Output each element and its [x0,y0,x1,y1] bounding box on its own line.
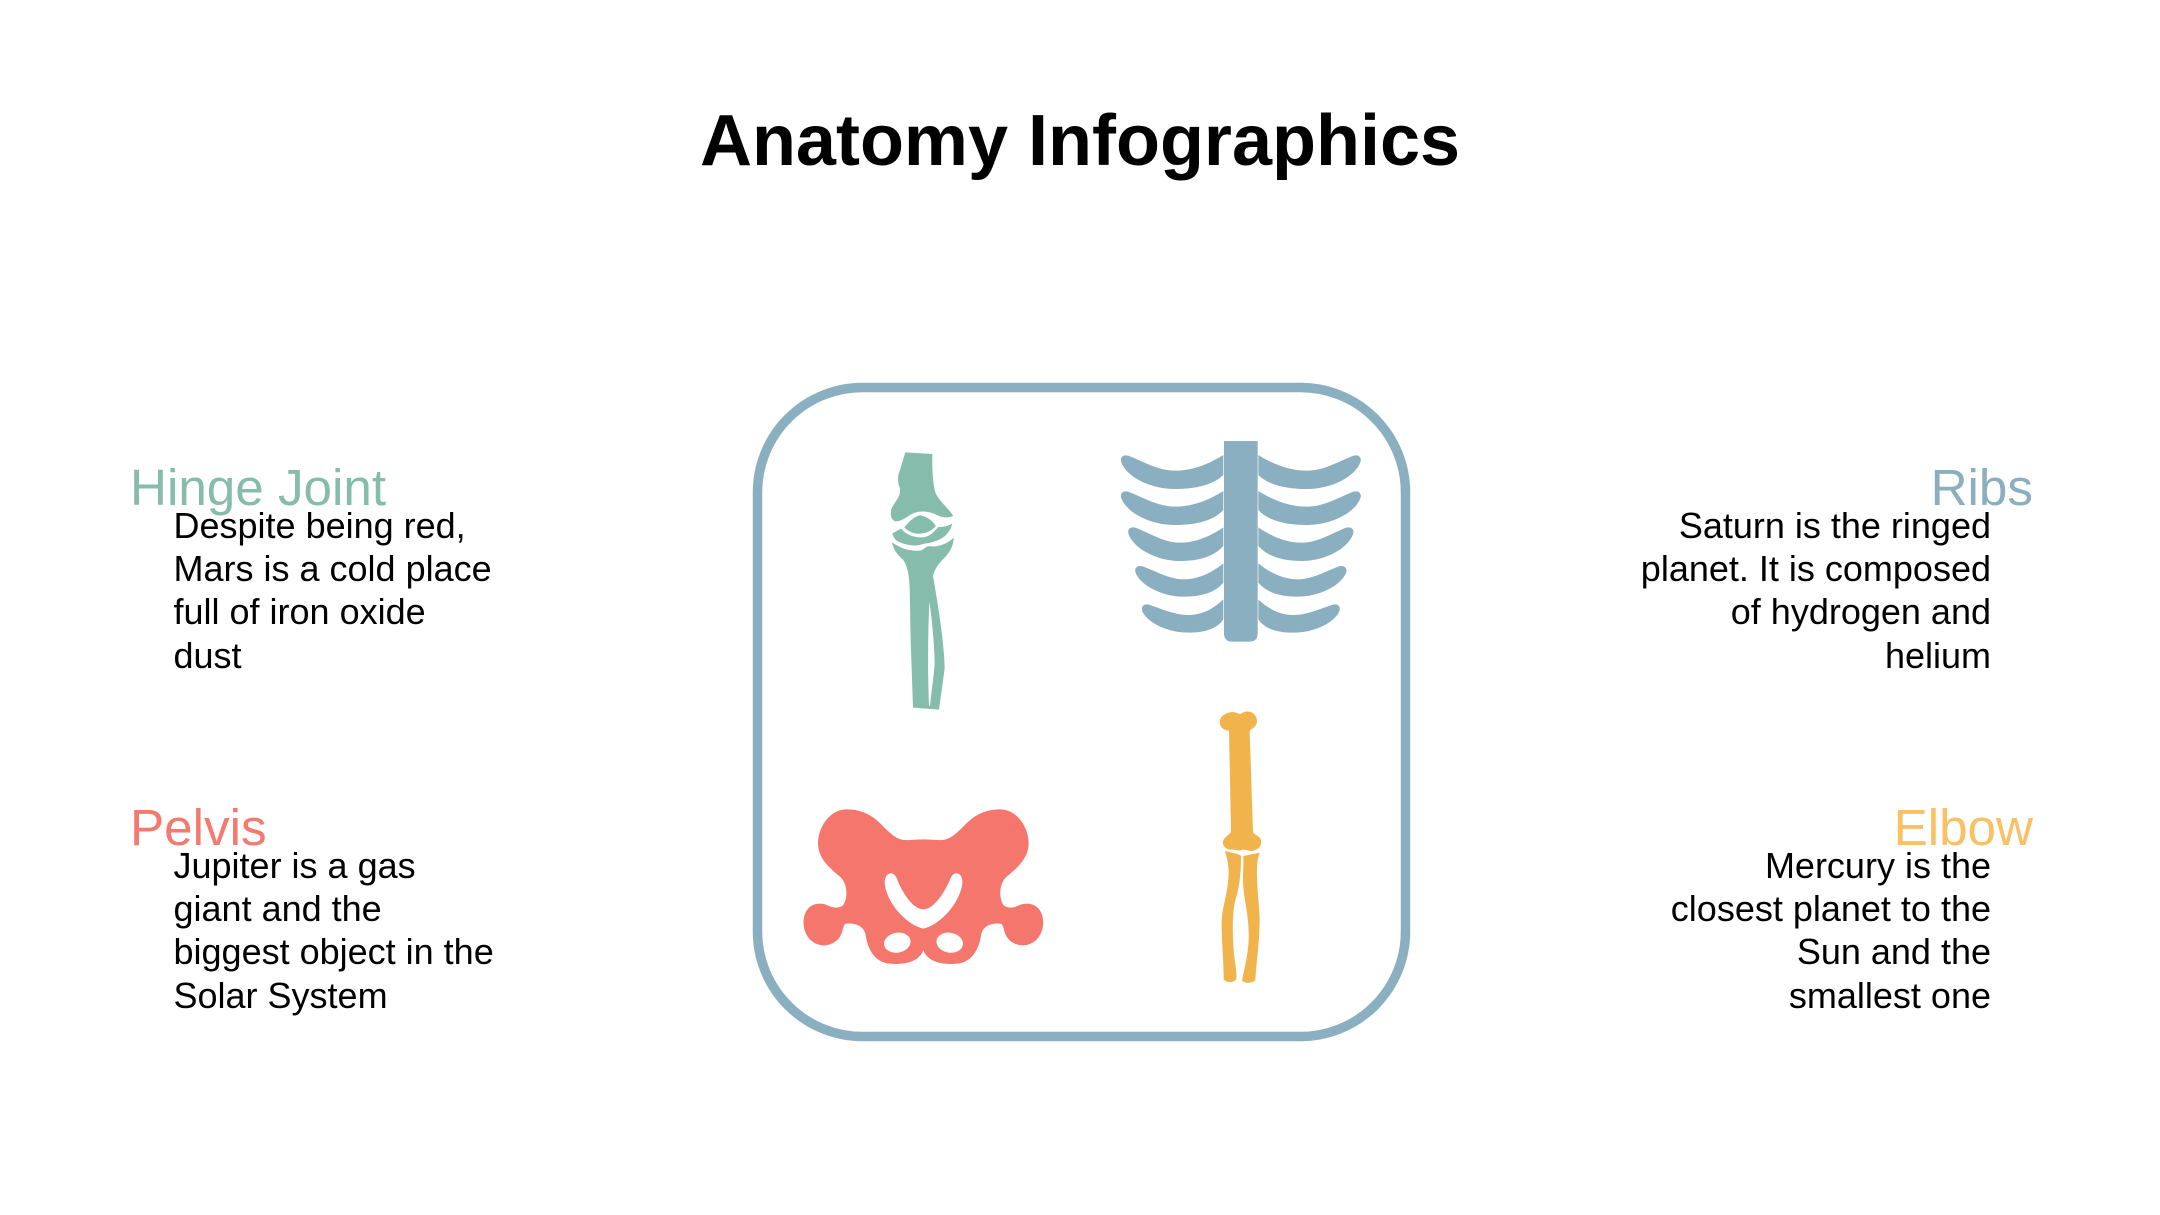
text block: Hinge Joint description [174,505,492,676]
text block: Elbow description: Mercury is the [1765,845,1991,886]
text block: Pelvis description: biggest object in the [174,931,494,972]
text block: Ribs description [1641,505,1991,676]
text block: Hinge Joint description: full of iron oxide [174,591,426,632]
text block: Elbow description: closest planet to the [1671,888,1991,929]
text block: Elbow description [1671,845,1991,1016]
icon: elbow [1220,712,1261,983]
panel: rounded frame [758,388,1406,1036]
heading: Pelvis: Pelvis [130,799,267,856]
heading: Hinge Joint: Hinge Joint [130,459,386,516]
text block: Hinge Joint description: Despite being red, [174,505,466,546]
text block: Elbow description: smallest one [1789,975,1991,1016]
right ribs [1258,455,1361,633]
heading: Elbow: Elbow [1894,799,2033,856]
icon: ribs [1121,441,1361,642]
spine [1224,441,1258,642]
text block: Hinge Joint description: dust [174,635,242,676]
icon: pelvis [803,809,1043,964]
icon: hinge joint [891,452,954,710]
text block: Ribs description: helium [1885,635,1991,676]
text block: Pelvis description: Solar System [174,975,388,1016]
text block: Pelvis description [174,845,494,1016]
left ribs [1121,455,1223,633]
title: Anatomy Infographics [700,101,1460,181]
heading: Ribs: Ribs [1931,459,2033,516]
text block: Pelvis description: giant and the [174,888,382,929]
text block: Ribs description: Saturn is the ringed [1679,505,1991,546]
text block: Ribs description: planet. It is composed [1641,548,1991,589]
text block: Pelvis description: Jupiter is a gas [174,845,416,886]
text block: Hinge Joint description: Mars is a cold place [174,548,492,589]
text block: Ribs description: of hydrogen and [1731,591,1991,632]
text block: Elbow description: Sun and the [1797,931,1991,972]
